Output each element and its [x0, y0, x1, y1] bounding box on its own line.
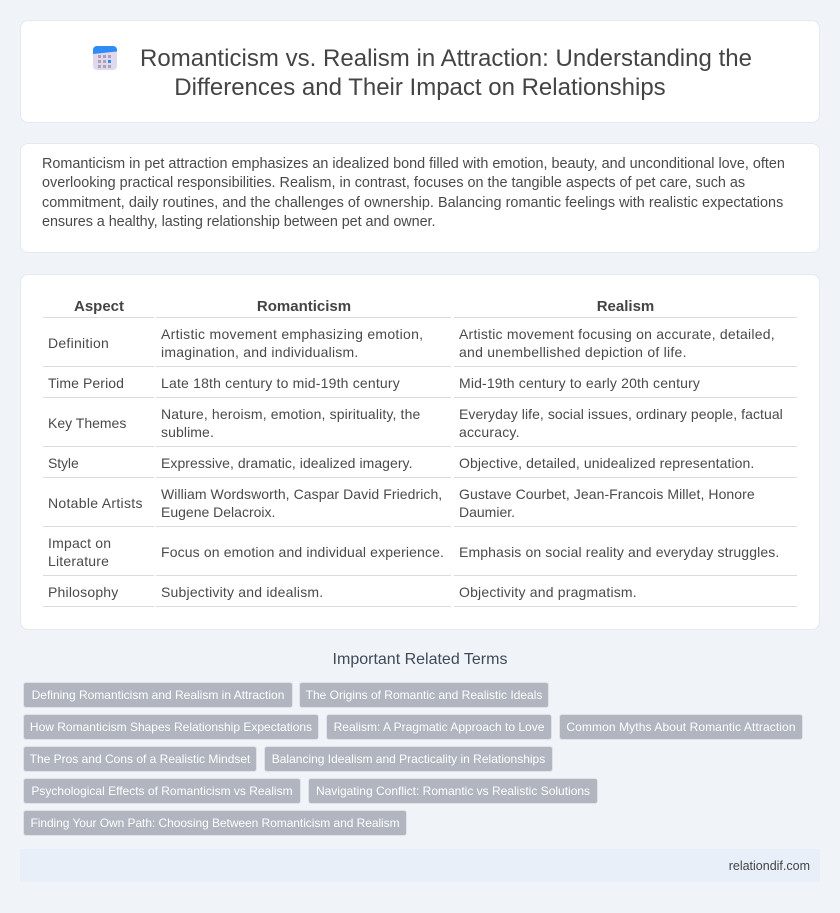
row: notable artists: Gustave Courbet, Jean-Francois Millet, Honore — [459, 486, 755, 502]
row: definition: imagination, and individualism. — [161, 344, 358, 360]
panel: comparison table — [20, 274, 820, 630]
intro text: commitment, daily routines, and the challenges of ownership. Balancing romantic feelings with realistic expectations — [42, 195, 783, 211]
row: time period: Time Period — [48, 375, 124, 391]
intro text — [42, 156, 785, 230]
row: style — [48, 455, 754, 471]
title — [140, 45, 752, 101]
row: impact on literature: Literature — [48, 553, 109, 569]
row: style: Objective, detailed, unidealized representation. — [459, 455, 754, 471]
heading: related terms: Important Related Terms — [333, 651, 507, 668]
row: impact on literature: Focus on emotion and individual experience. — [161, 544, 444, 560]
row: notable artists — [48, 486, 755, 520]
row: notable artists: William Wordsworth, Caspar David Friedrich, — [161, 486, 442, 502]
row: time period: Mid-19th century to early 20th century — [459, 375, 700, 391]
tag: Balancing Idealism and Practicality in Relationships — [272, 752, 545, 766]
panel: intro — [20, 143, 820, 253]
tag: Psychological Effects of Romanticism vs Realism — [31, 784, 293, 798]
intro text: Romanticism in pet attraction emphasizes an idealized bond filled with emotion, beauty, and unconditional love, often — [42, 156, 785, 172]
row: key themes: Key Themes — [48, 415, 126, 431]
title: Differences and Their Impact on Relationships — [174, 74, 666, 101]
row: impact on literature: Emphasis on social reality and everyday struggles. — [459, 544, 779, 560]
row: style: Expressive, dramatic, idealized imagery. — [161, 455, 413, 471]
row: definition — [48, 326, 775, 360]
row: time period: Late 18th century to mid-19th century — [161, 375, 400, 391]
row: impact on literature: Impact on — [48, 535, 111, 551]
tag: Navigating Conflict: Romantic vs Realistic Solutions — [316, 784, 590, 798]
related term tags — [23, 682, 803, 836]
icon: calendar — [93, 46, 117, 70]
row: definition: Artistic movement focusing on accurate, detailed, — [459, 326, 775, 342]
tag — [23, 810, 407, 836]
row: impact on literature — [48, 535, 779, 569]
tag: Finding Your Own Path: Choosing Between Romanticism and Realism — [30, 816, 400, 830]
tag: How Romanticism Shapes Relationship Expectations — [30, 720, 312, 734]
tag — [299, 682, 549, 708]
title: Romanticism vs. Realism in Attraction: Understanding the — [140, 45, 752, 72]
tag: The Pros and Cons of a Realistic Mindset — [30, 752, 250, 766]
tag — [264, 746, 553, 772]
tag — [326, 714, 552, 740]
tag — [23, 714, 319, 740]
tag — [308, 778, 598, 804]
table header: Aspect — [74, 298, 124, 315]
tag: Defining Romanticism and Realism in Attraction — [32, 688, 284, 702]
row: time period — [48, 375, 700, 391]
row: philosophy: Subjectivity and idealism. — [161, 584, 323, 600]
footer — [20, 849, 820, 882]
row: key themes: Nature, heroism, emotion, spirituality, the — [161, 406, 420, 422]
tag — [23, 682, 293, 708]
table header: Romanticism — [257, 298, 351, 315]
row: philosophy — [48, 584, 637, 600]
row: style: Style — [48, 455, 79, 471]
row: notable artists: Daumier. — [459, 504, 515, 520]
row: notable artists: Notable Artists — [48, 495, 143, 511]
intro text: ensures a healthy, lasting relationship between pet and owner. — [42, 214, 435, 230]
intro text: overlooking practical responsibilities. Realism, in contrast, focuses on the tangible aspects of pet care, such as — [42, 175, 745, 191]
row: definition: Definition — [48, 335, 109, 351]
table header — [74, 298, 654, 315]
tag — [23, 746, 257, 772]
row: key themes: sublime. — [161, 424, 214, 440]
row: definition: and unembellished depiction of life. — [459, 344, 687, 360]
tag: Realism: A Pragmatic Approach to Love — [334, 720, 544, 734]
table header: Realism — [597, 298, 654, 315]
tag: Common Myths About Romantic Attraction — [566, 720, 796, 734]
panel: header — [20, 20, 820, 123]
row: definition: Artistic movement emphasizing emotion, — [161, 326, 423, 342]
footer link: relationdif.com — [729, 859, 810, 873]
tag — [23, 778, 301, 804]
row: key themes — [48, 406, 783, 440]
row: key themes: Everyday life, social issues, ordinary people, factual — [459, 406, 783, 422]
row: philosophy: Objectivity and pragmatism. — [459, 584, 637, 600]
tag: The Origins of Romantic and Realistic Ideals — [306, 688, 542, 702]
row: notable artists: Eugene Delacroix. — [161, 504, 275, 520]
tag — [559, 714, 803, 740]
row: philosophy: Philosophy — [48, 584, 118, 600]
row: key themes: accuracy. — [459, 424, 520, 440]
